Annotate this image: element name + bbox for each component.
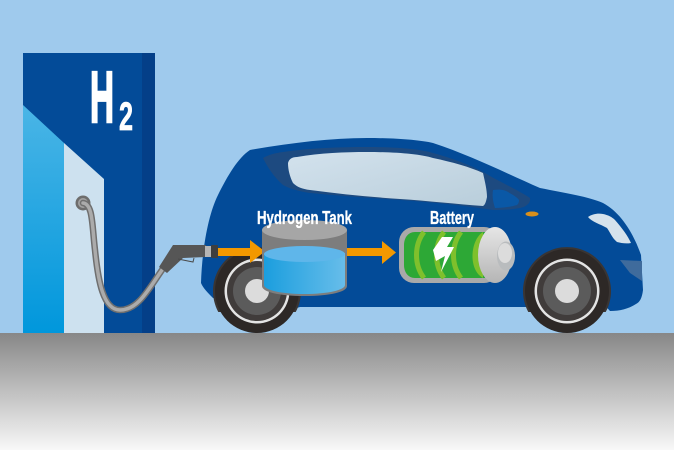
arrow: tank to battery: [347, 241, 396, 264]
panel: hydrogen station: [23, 53, 155, 333]
battery terminal: [497, 242, 515, 270]
rear wheel: [213, 247, 301, 333]
fuel hose: [76, 196, 162, 310]
station pale panel: [64, 143, 104, 333]
headlight: [588, 214, 631, 243]
battery green cell: [404, 232, 485, 278]
icon: lightning bolt: [433, 237, 454, 272]
battery: [399, 227, 515, 283]
battery cap: [478, 227, 512, 283]
fuel nozzle: [159, 245, 218, 273]
front wheel: [523, 247, 611, 333]
station cyan panel: [23, 105, 64, 333]
arrow: nozzle to tank: [218, 240, 265, 263]
tank water: [264, 253, 345, 294]
side marker light: [526, 212, 538, 216]
ground: [0, 333, 674, 450]
car side glass: [288, 152, 487, 206]
label: Battery: Battery: [430, 208, 474, 228]
label: Hydrogen Tank: Hydrogen Tank: [257, 208, 353, 228]
panel: hydrogen station: H: [90, 58, 114, 138]
car body: [201, 138, 643, 311]
car window frame: [263, 147, 530, 210]
hydrogen tank: [262, 220, 347, 296]
car: [201, 138, 643, 333]
station side strip: [142, 53, 155, 333]
H2 subscript: 2: [119, 95, 133, 139]
car quarter glass: [493, 190, 519, 208]
front grille: [620, 260, 642, 281]
